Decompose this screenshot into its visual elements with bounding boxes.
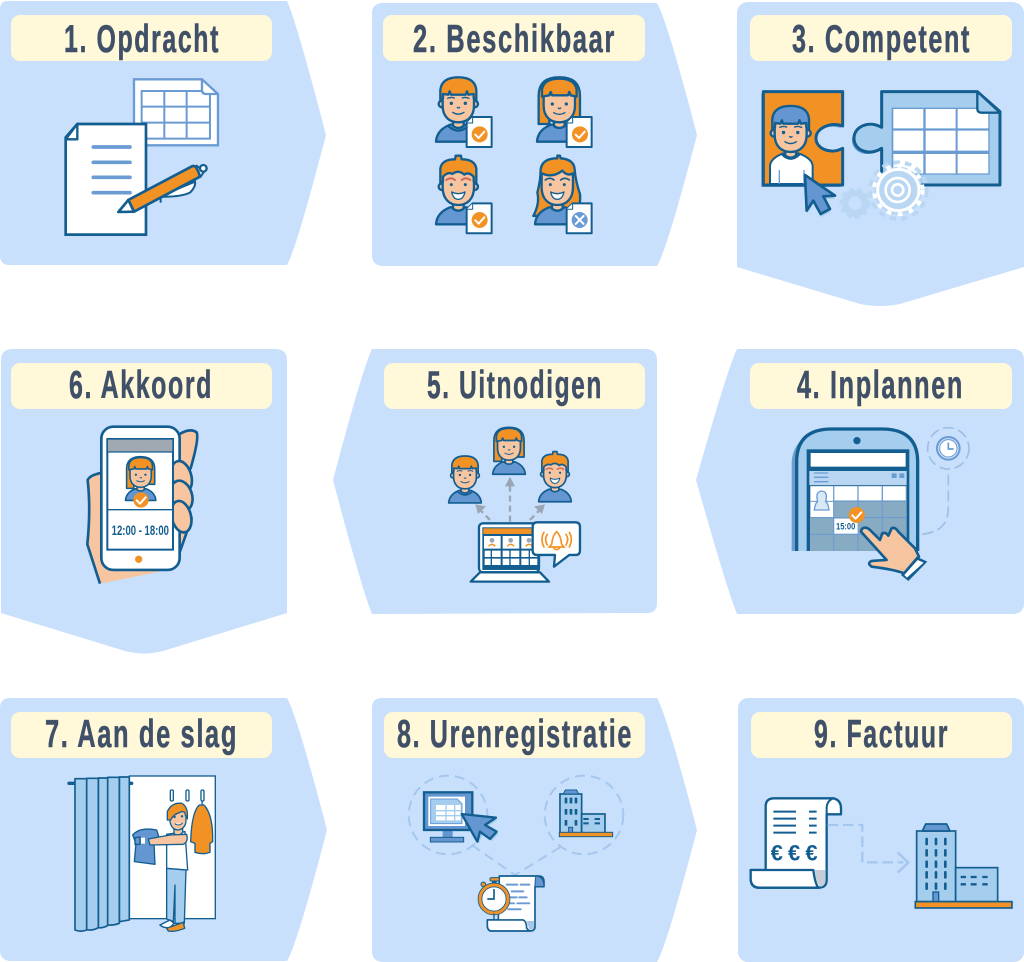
panel: 5. Uitnodigen [333, 349, 657, 614]
icon: four people with availability documents [436, 77, 592, 233]
panel: 3. Competent [737, 2, 1024, 306]
heading: 1. Opdracht [11, 15, 272, 61]
heading: 9. Factuur [751, 712, 1012, 758]
heading: 6. Akkoord: 6. Akkoord [69, 364, 213, 407]
panel: 4. Inplannen [696, 349, 1024, 614]
panel: 8. Urenregistratie [372, 698, 697, 962]
icon: invoice sent to company building: €€€ [771, 841, 818, 866]
panel: 7. Aan de slag [0, 698, 327, 961]
icon: contract, spreadsheet and pen [66, 79, 218, 235]
heading: 7. Aan de slag: 7. Aan de slag [45, 713, 238, 756]
icon: time registration between computer, building and timesheet [409, 776, 623, 931]
heading: 6. Akkoord [11, 363, 272, 409]
panel: 2. Beschikbaar [372, 3, 697, 266]
icon: hand holding phone with approval: 12:00 - 18:00 [112, 522, 169, 538]
icon: hand holding phone with approval [87, 427, 197, 584]
heading: 2. Beschikbaar: 2. Beschikbaar [413, 18, 616, 61]
heading: 8. Urenregistratie [384, 712, 645, 758]
heading: 8. Urenregistratie: 8. Urenregistratie [397, 713, 633, 756]
panel: 1. Opdracht [0, 1, 326, 265]
heading: 2. Beschikbaar [383, 15, 645, 61]
heading: 1. Opdracht: 1. Opdracht [64, 18, 220, 61]
panel: 6. Akkoord [1, 349, 287, 654]
heading: 5. Uitnodigen [384, 363, 645, 409]
heading: 7. Aan de slag [11, 712, 272, 758]
icon: laptop inviting three people [449, 427, 580, 582]
icon: puzzle of person and spreadsheet with gears and cursor [761, 92, 1000, 219]
icon: tablet planning with clock and tapping hand [792, 428, 969, 581]
icon: invoice sent to company building [751, 798, 1012, 908]
icon: tablet planning with clock and tapping hand: 15:00 [836, 521, 855, 531]
heading: 9. Factuur: 9. Factuur [814, 713, 949, 756]
heading: 5. Uitnodigen: 5. Uitnodigen [427, 364, 603, 407]
panel: 9. Factuur [738, 698, 1024, 962]
icon: fitting room with person holding shirt [69, 776, 215, 931]
